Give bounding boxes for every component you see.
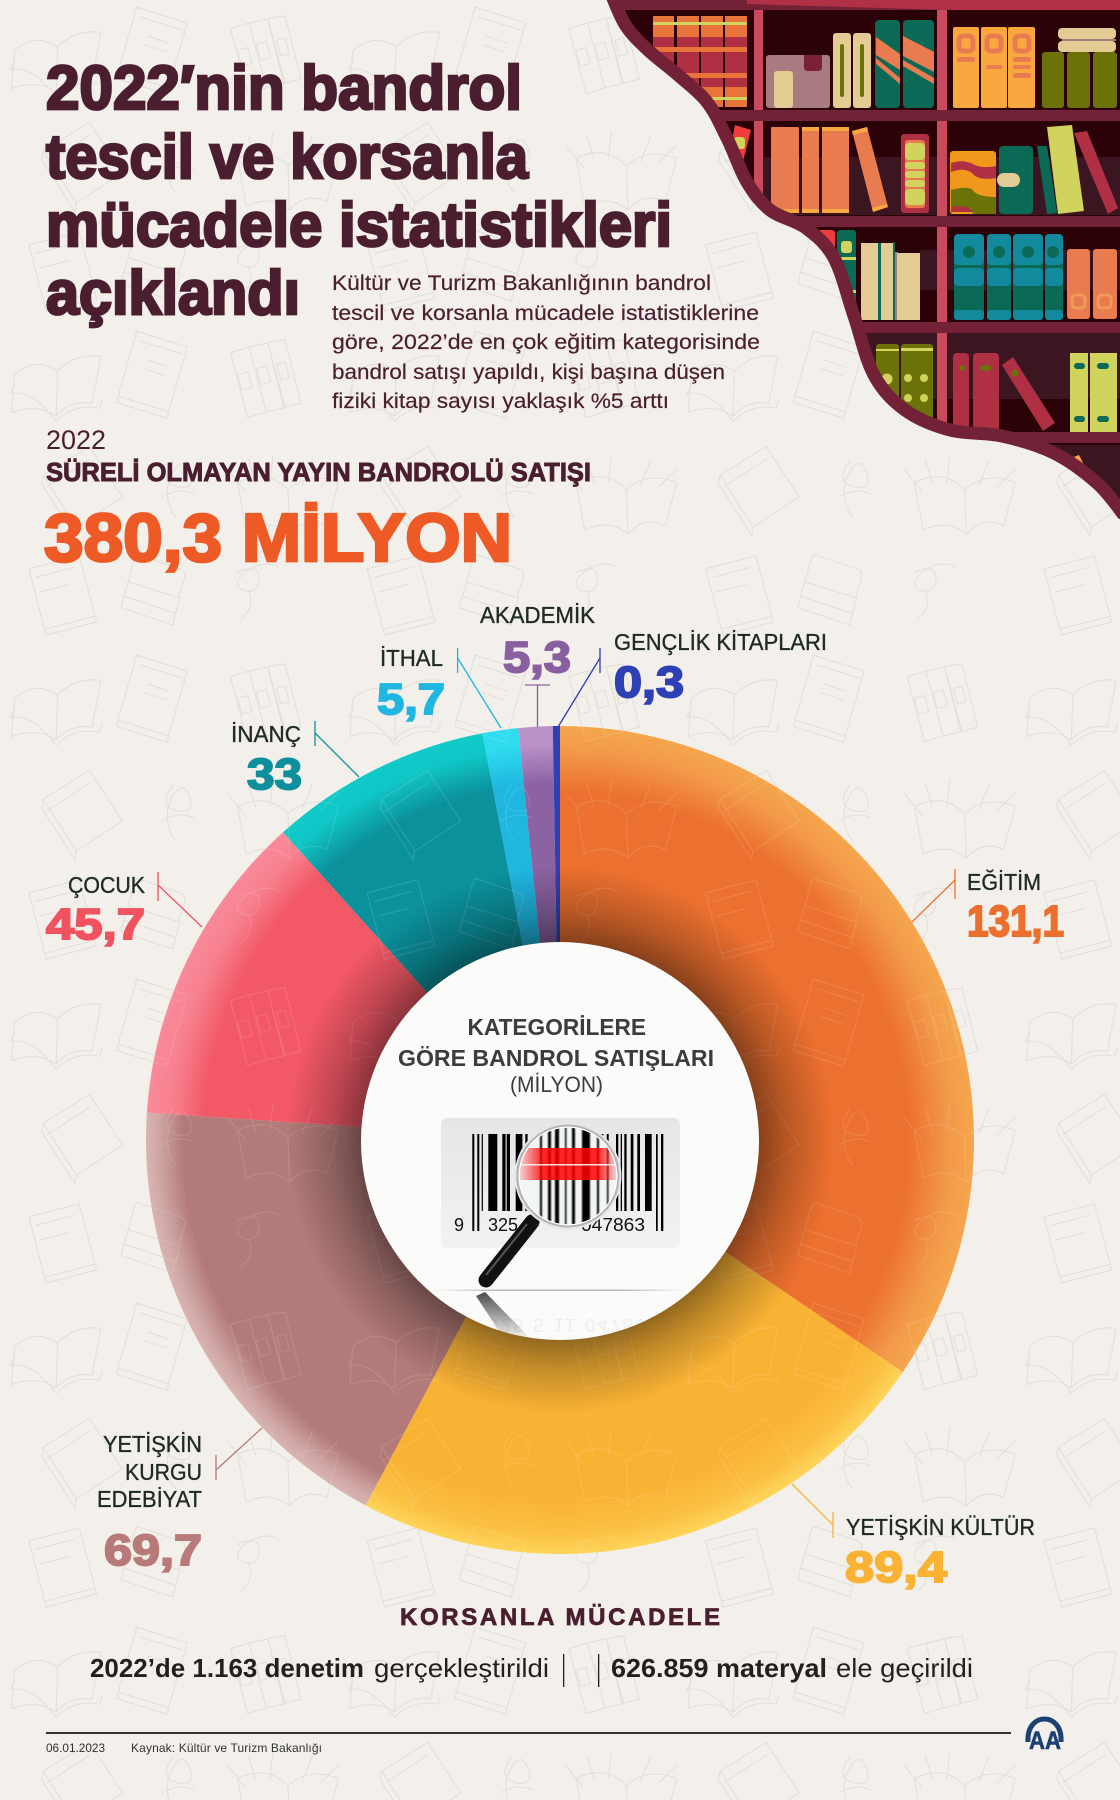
- slice: Eğitim: [560, 726, 974, 1372]
- label: İnanç: [231, 721, 359, 799]
- summary paragraph: fiziki kitap sayısı yaklaşık %5 arttı: [332, 389, 669, 413]
- row 2: [733, 125, 751, 160]
- barcode: 9: [454, 1215, 464, 1235]
- label: Yetişkin Kültür: YETİŞKİN KÜLTÜR: [846, 1514, 1035, 1540]
- label: İthal: [377, 645, 501, 728]
- title: 2022′nin bandrol: [46, 54, 522, 123]
- label: İnanç: 33: [247, 750, 302, 799]
- row 4: [876, 344, 899, 397]
- label: Eğitim: 131,1: [967, 897, 1064, 946]
- title: tescil ve korsanla: [46, 123, 528, 192]
- center hub with barcode: [361, 942, 759, 1340]
- total sales headline: 380,3 MİLYON: [44, 500, 512, 576]
- stat: seized materials: [598, 1653, 973, 1687]
- source: Kaynak: Kültür ve Turizm Bakanlığı: [131, 1741, 322, 1755]
- barcode: 047863: [581, 1215, 645, 1235]
- title: mücadele istatistikleri: [46, 191, 672, 260]
- slice: İthal: [482, 728, 560, 1140]
- label: Eğitim: EĞİTİM: [967, 869, 1041, 895]
- hub heading: GÖRE BANDROL SATIŞLARI: [398, 1045, 714, 1071]
- slice: Yetişkin Kurgu Edebiyat: [146, 1113, 560, 1506]
- label: Akademik: [480, 602, 596, 727]
- stat: seized materials: 626.859 materyal: [611, 1653, 827, 1683]
- label: İnanç: İNANÇ: [231, 721, 301, 747]
- stat: inspections: [90, 1653, 564, 1687]
- magnifying glass: [486, 1124, 620, 1280]
- barcode: 325: [488, 1215, 518, 1235]
- chart texture overlay: [146, 726, 974, 1554]
- slice: Yetişkin Kültür: [366, 1140, 903, 1554]
- slice: Çocuk: [147, 832, 560, 1140]
- illustration: bookshelf: [600, 0, 1120, 530]
- label: İthal: 5,7: [377, 675, 445, 724]
- label: Yetişkin Kurgu Edebiyat: EDEBİYAT: [97, 1486, 202, 1512]
- label: Yetişkin Kurgu Edebiyat: 69,7: [104, 1526, 202, 1575]
- barcode: [441, 1118, 680, 1248]
- date: 06.01.2023: [46, 1741, 105, 1755]
- label: Yetişkin Kurgu Edebiyat: [97, 1428, 262, 1575]
- label: Çocuk: 45,7: [46, 900, 145, 949]
- title: açıklandı: [46, 259, 300, 328]
- footer: [46, 1719, 1061, 1755]
- stat: inspections: gerçekleştirildi: [374, 1653, 549, 1683]
- label: Yetişkin Kültür: [792, 1484, 1035, 1592]
- label: Gençlik Kitapları: [558, 629, 827, 727]
- inner shading: [146, 726, 974, 1554]
- logo: AA: AA: [1029, 1727, 1061, 1755]
- reflection: [438, 1290, 678, 1336]
- shelf frame: [754, 10, 947, 431]
- summary paragraph: Kültür ve Turizm Bakanlığının bandrol: [332, 271, 711, 295]
- label: Yetişkin Kurgu Edebiyat: YETİŞKİN: [103, 1431, 202, 1457]
- summary paragraph: bandrol satışı yapıldı, kişi başına düşen: [332, 360, 725, 384]
- hub heading: KATEGORİLERE: [468, 1014, 646, 1040]
- summary paragraph: göre, 2022’de en çok eğitim kategorisinde: [332, 330, 760, 354]
- label: Çocuk: ÇOCUK: [68, 872, 146, 898]
- total sales headline: [44, 425, 591, 576]
- label: İthal: İTHAL: [380, 645, 443, 671]
- label: Çocuk: [46, 872, 202, 949]
- label: Gençlik Kitapları: 0,3: [614, 658, 684, 707]
- label: Yetişkin Kültür: 89,4: [845, 1543, 948, 1592]
- label: Akademik: AKADEMİK: [480, 602, 596, 628]
- logo: AA: [1028, 1719, 1061, 1755]
- summary paragraph: tescil ve korsanla mücadele istatistiklerine: [332, 301, 759, 325]
- reflection: 325 5 11 047863: [488, 1315, 658, 1335]
- label: Gençlik Kitapları: GENÇLİK KİTAPLARI: [614, 629, 827, 655]
- hub heading: (MİLYON): [510, 1072, 603, 1097]
- donut chart: [146, 726, 974, 1554]
- stat: seized materials: ele geçirildi: [836, 1653, 973, 1683]
- label: Akademik: 5,3: [503, 633, 571, 682]
- anti-piracy section: [90, 1604, 973, 1687]
- slice: Akademik: [518, 726, 560, 1140]
- row 1: [653, 37, 747, 87]
- slice: Gençlik Kitapları: [553, 726, 560, 1140]
- stat: inspections: 2022’de 1.163 denetim: [90, 1653, 364, 1683]
- slice: İnanç: [283, 733, 560, 1140]
- row 3: [793, 230, 815, 244]
- summary paragraph: [332, 271, 760, 413]
- hub heading: [398, 1014, 714, 1097]
- section heading: KORSANLA MÜCADELE: [400, 1604, 720, 1631]
- total sales headline: 2022: [46, 425, 106, 455]
- label: Eğitim: [912, 869, 1064, 946]
- label: Yetişkin Kurgu Edebiyat: KURGU: [125, 1459, 202, 1485]
- title: [46, 54, 672, 328]
- total sales headline: SÜRELİ OLMAYAN YAYIN BANDROLÜ SATIŞI: [46, 458, 591, 487]
